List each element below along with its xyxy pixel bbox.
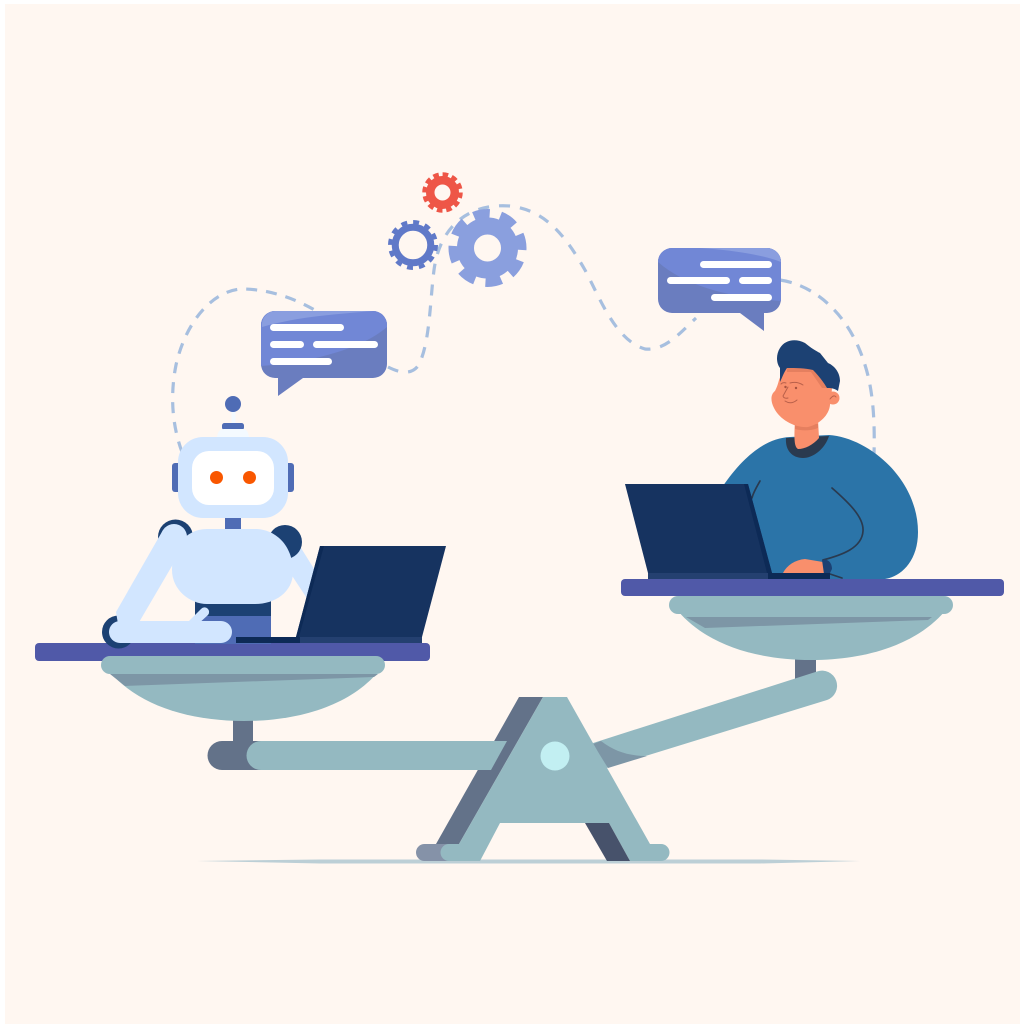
facial features	[781, 382, 836, 403]
head	[178, 437, 288, 518]
right shoulder	[268, 525, 302, 559]
neck	[225, 516, 241, 531]
speech bubble: robot	[261, 311, 387, 396]
left upper arm	[116, 524, 187, 624]
face screen	[192, 451, 274, 505]
robot	[102, 396, 316, 648]
neck	[794, 420, 819, 449]
cuff	[822, 560, 832, 575]
hair	[777, 340, 840, 391]
left table top	[35, 643, 430, 661]
beam shadow end left	[208, 741, 262, 770]
person	[723, 340, 918, 579]
icon: large periwinkle gear	[454, 214, 522, 282]
head	[771, 362, 832, 427]
arm crease lines	[752, 481, 863, 578]
laptop: robot	[236, 546, 446, 643]
left elbow ring	[102, 616, 135, 648]
fulcrum dark left side	[436, 697, 543, 844]
left pan	[101, 656, 385, 721]
right beam arm	[590, 671, 837, 770]
icon: red gear	[424, 174, 460, 210]
left shoulder ring	[158, 520, 193, 554]
fulcrum body	[440, 697, 670, 861]
eyes	[784, 386, 797, 389]
hand	[783, 559, 825, 573]
collar	[786, 436, 829, 458]
ears	[172, 463, 294, 492]
left pan stem	[233, 718, 253, 744]
thumb	[187, 607, 209, 625]
right pan stem	[795, 658, 816, 682]
dashed connection line: right bubble to person	[780, 280, 874, 455]
speech bubble: person	[658, 248, 781, 331]
torso	[723, 435, 918, 579]
left foot shadow	[416, 844, 466, 861]
forehead shadow	[787, 368, 827, 388]
right beam arm shadow	[593, 741, 647, 768]
neck shadow	[795, 424, 818, 430]
ear	[826, 392, 840, 404]
dashed connection line: robot to left bubble	[173, 289, 318, 452]
ground shadow	[197, 860, 860, 864]
left beam arm	[246, 741, 507, 770]
dashed connection line: left bubble to right bubble via gears	[388, 206, 696, 372]
torso	[172, 529, 293, 604]
antenna	[217, 396, 249, 437]
pivot	[540, 742, 570, 770]
laptop: person	[625, 484, 830, 579]
waist	[195, 598, 271, 644]
right table top	[621, 579, 1004, 596]
fulcrum dark right leg	[585, 823, 630, 861]
eyes	[210, 471, 256, 484]
right pan	[669, 596, 953, 660]
right arm	[285, 540, 316, 603]
forearm	[109, 621, 232, 643]
icon: blue gear	[390, 222, 436, 268]
scale: fulcrum and beam	[208, 658, 837, 861]
